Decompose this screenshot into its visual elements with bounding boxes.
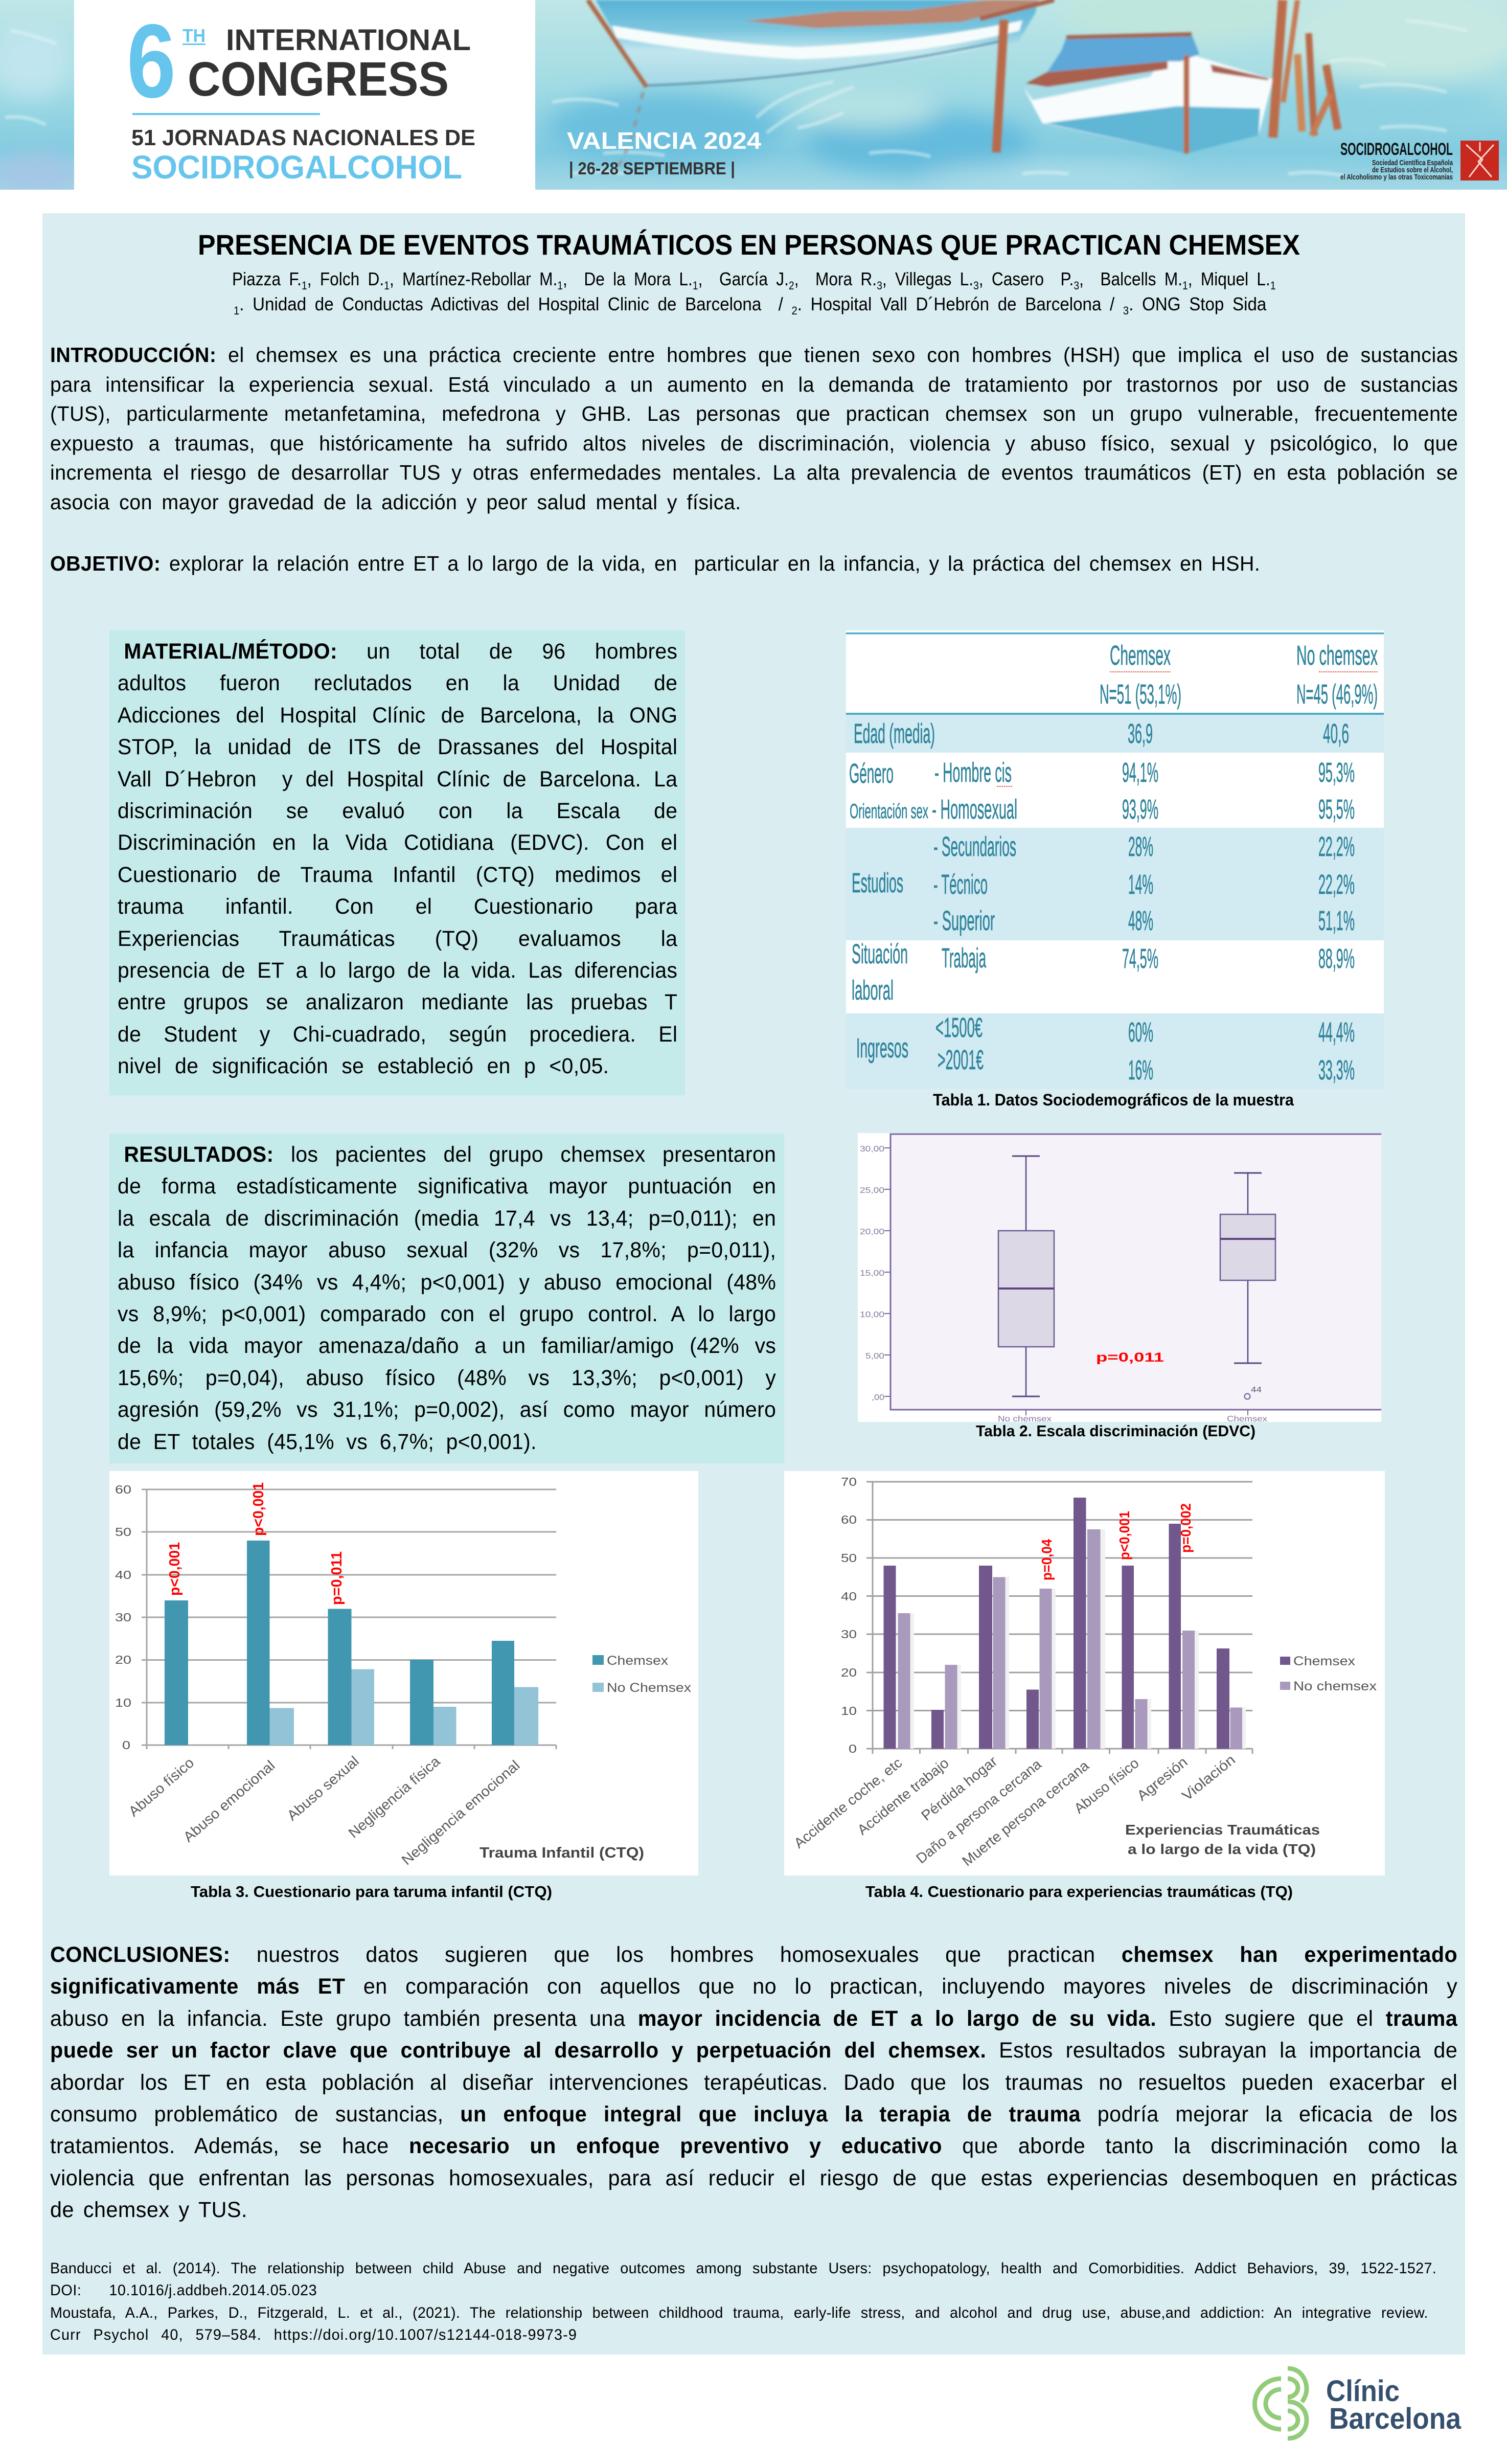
- results text: abuso físico (34% vs 4,4%; p<0,001) y abuso emocional (48%: [118, 1270, 776, 1295]
- p values: [1039, 1503, 1194, 1580]
- references: Curr Psychol 40, 579–584. https://doi.org/10.1007/s12144-018-9973-9: [50, 2326, 577, 2343]
- y axis: 20,00: [860, 1228, 884, 1236]
- p values: p<0,001: [167, 1542, 183, 1596]
- bars: no chemsex: [898, 1529, 1242, 1749]
- bar chart: childhood trauma CTQ: [109, 1471, 698, 1875]
- x axis labels: [998, 1410, 1267, 1423]
- x axis labels: Accidente coche, etc: [791, 1755, 905, 1851]
- material and method text: STOP, la unidad de ITS de Drassanes del Hospital: [118, 735, 677, 759]
- table header: N=51 (53,1%): [1100, 679, 1181, 710]
- y axis labels: 0: [849, 1742, 857, 1755]
- y axis: ,00: [872, 1393, 884, 1402]
- table values: no chemsex: [1318, 718, 1355, 1086]
- introduction text: incrementa el riesgo de desarrollar TUS y otras enfermedades mentales. La alta prevalencia de eventos traumáticos (ET) en esta población se: [50, 461, 1458, 484]
- box plot: discrimination scale: 44: [1251, 1386, 1262, 1394]
- x axis labels: [791, 1752, 1238, 1869]
- table values: chemsex: 48%: [1128, 906, 1153, 936]
- y axis labels: 10: [841, 1704, 857, 1717]
- painting: small boat: [996, 0, 1338, 153]
- x axis labels: Abuso físico: [126, 1754, 197, 1820]
- table 1: sociodemographic data: [846, 630, 1384, 1086]
- table row labels: laboral: [852, 975, 894, 1006]
- bars: chemsex: [883, 1498, 1229, 1749]
- y axis labels: 40: [841, 1590, 857, 1603]
- results text: agresión (59,2% vs 31,1%; p=0,002), así como mayor número: [118, 1397, 776, 1422]
- table row labels: Trabaja: [942, 943, 986, 974]
- table row labels: Situación: [852, 939, 908, 969]
- caption: table 2: Tabla 2. Escala discriminación (EDVC): [976, 1422, 1255, 1440]
- table row labels: Edad (media): [854, 718, 935, 749]
- y axis: 25,00: [860, 1186, 884, 1195]
- gridlines: [866, 1482, 1252, 1754]
- bar shadows: [910, 1529, 1246, 1749]
- conclusions text: abuso en la infancia. Este grupo también presenta una mayor incidencia de ET a lo largo de su vida. Esto sugiere que el trauma: [50, 2006, 1457, 2031]
- location and dates: [567, 127, 761, 178]
- spell-check squiggles: [997, 672, 1378, 786]
- socidrogalcohol society logo: de Estudios sobre el Alcohol,: [1372, 166, 1453, 174]
- congress logo panel: 51 JORNADAS NACIONALES DE: [131, 125, 475, 150]
- location and dates: VALENCIA 2024: [567, 127, 761, 154]
- p values: p<0,001: [1116, 1511, 1132, 1560]
- table row labels: - Homosexual: [932, 794, 1017, 825]
- table row labels: <1500€: [935, 1012, 983, 1043]
- table values: chemsex: [1122, 718, 1158, 1086]
- box plot: discrimination scale: [858, 1133, 1381, 1422]
- bars: chemsex: [165, 1541, 514, 1745]
- table values: no chemsex: 40,6: [1323, 718, 1349, 749]
- chart title: [1125, 1822, 1320, 1857]
- table values: chemsex: 36,9: [1128, 718, 1153, 749]
- material and method text: entre grupos se analizaron mediante las pruebas T: [118, 990, 677, 1014]
- y axis labels: 60: [115, 1483, 131, 1496]
- legend: Chemsex: [607, 1654, 669, 1668]
- table values: chemsex: 14%: [1128, 869, 1153, 900]
- y axis labels: 50: [841, 1551, 857, 1565]
- logo wordmark: Clínic: [1326, 2375, 1400, 2408]
- table row labels: >2001€: [938, 1045, 984, 1075]
- material and method text: Cuestionario de Trauma Infantil (CTQ) medimos el: [118, 863, 677, 887]
- x axis labels: Abuso emocional: [180, 1757, 278, 1845]
- y axis labels: 0: [122, 1738, 130, 1752]
- caption: table 4: Tabla 4. Cuestionario para experiencias traumáticas (TQ): [865, 1883, 1293, 1901]
- x axis labels: [126, 1753, 523, 1868]
- y axis labels: 60: [841, 1513, 857, 1526]
- y axis labels: 30: [841, 1627, 857, 1641]
- material and method text: Vall D´Hebron y del Hospital Clínic de Barcelona. La: [118, 767, 677, 792]
- material and method text: Adicciones del Hospital Clínic de Barcelona, la ONG: [118, 703, 677, 728]
- material and method text: discriminación se evaluó con la Escala de: [118, 799, 677, 823]
- y axis labels: 70: [841, 1475, 857, 1488]
- legend: Chemsex: [1293, 1654, 1356, 1668]
- material and method text: trauma infantil. Con el Cuestionario para: [118, 894, 677, 919]
- logo wordmark: [1326, 2375, 1462, 2435]
- material and method text: MATERIAL/MÉTODO: un total de 96 hombres: [124, 639, 677, 664]
- results text: de forma estadísticamente significativa mayor puntuación en: [118, 1174, 776, 1199]
- bar chart: traumatic experiences TQ: [784, 1471, 1385, 1875]
- conclusions text: CONCLUSIONES: nuestros datos sugieren que los hombres homosexuales que practican chemsex han experimentado: [50, 1942, 1457, 1967]
- y axis: 5,00: [865, 1352, 884, 1361]
- material and method box: [109, 630, 685, 1095]
- introduction text: asocia con mayor gravedad de la adicción y peor salud mental y física.: [50, 490, 741, 514]
- results text: 15,6%; p=0,04), abuso físico (48% vs 13,3%; p<0,001) y: [118, 1366, 776, 1390]
- y axis labels: 50: [115, 1525, 131, 1539]
- table 1: sociodemographic data: 74,5%: [1122, 943, 1158, 974]
- affiliations: 1. Unidad de Conductas Adictivas del Hospital Clinic de Barcelona / 2. Hospital Vall D´Hebrón de Barcelona / 3. ONG Stop Sida: [234, 293, 1266, 317]
- y axis: [860, 1145, 890, 1402]
- conclusions text: consumo problemático de sustancias, un enfoque integral que incluya la terapia de trauma podría mejorar la eficacia de los: [50, 2102, 1457, 2127]
- x axis labels: Daño a persona cercana: [913, 1756, 1044, 1867]
- y axis labels: 20: [841, 1666, 857, 1679]
- introduction text: (TUS), particularmente metanfetamina, mefedrona y GHB. Las personas que practican chemsex son un grupo vulnerable, frecuentemente: [50, 402, 1458, 425]
- conclusions text: abordar los ET en esta población al diseñar intervenciones terapéuticas. Dado que los traumas no resueltos pueden exacerbar el: [50, 2070, 1457, 2095]
- results text: la escala de discriminación (media 17,4 vs 13,4; p=0,011); en: [118, 1206, 776, 1231]
- table 1: sociodemographic data: 94,1%: [1122, 757, 1158, 788]
- x axis labels: Abuso físico: [1071, 1755, 1142, 1817]
- table header: [1100, 640, 1378, 710]
- table row labels: Orientación sex: [850, 800, 928, 823]
- y axis labels: 10: [115, 1696, 131, 1709]
- caption: table 3: Tabla 3. Cuestionario para taruma infantil (CTQ): [191, 1883, 552, 1901]
- legend: No chemsex: [1293, 1679, 1377, 1693]
- congress logo panel: SOCIDROGALCOHOL: [131, 149, 462, 186]
- material and method text: adultos fueron reclutados en la Unidad de: [118, 671, 677, 695]
- introduction text: [50, 343, 1458, 514]
- material and method text: de Student y Chi-cuadrado, según procediera. El: [118, 1022, 677, 1047]
- x axis labels: Accidente trabajo: [854, 1755, 952, 1838]
- y axis: 10,00: [860, 1310, 884, 1319]
- bars: no chemsex: [270, 1669, 538, 1745]
- table row labels: Ingresos: [856, 1033, 908, 1064]
- table row labels: [849, 718, 1017, 1075]
- conclusions text: [50, 1942, 1458, 2222]
- references: Moustafa, A.A., Parkes, D., Fitzgerald, L. et al., (2021). The relationship between childhood trauma, early-life stress, and alcohol and drug use, abuse,and addiction: An integrative review.: [50, 2304, 1428, 2321]
- results text: [118, 1142, 776, 1454]
- introduction text: para intensificar la experiencia sexual. Está vinculado a un aumento en la demanda de tratamiento por trastornos por uso de sustancias: [50, 373, 1458, 396]
- p values: p=0,002: [1178, 1503, 1194, 1553]
- y axis labels: [841, 1475, 857, 1755]
- legend: [1280, 1654, 1377, 1693]
- results text: de la vida mayor amenaza/daño a un familiar/amigo (42% vs: [118, 1333, 776, 1358]
- location and dates: | 26-28 SEPTIEMBRE |: [569, 159, 735, 178]
- congress logo panel: INTERNATIONAL: [226, 24, 471, 57]
- table row labels: - Hombre cis: [934, 757, 1012, 788]
- material and method text: nivel de significación se estableció en p <0,05.: [118, 1054, 609, 1078]
- legend: [592, 1654, 692, 1695]
- box: no chemsex: [998, 1156, 1054, 1396]
- painting: large boat: [588, 0, 1054, 174]
- p values: p=0,04: [1039, 1539, 1055, 1580]
- gridlines: [142, 1489, 556, 1749]
- congress logo panel: TH: [182, 25, 206, 46]
- introduction text: expuesto a traumas, que históricamente ha sufrido altos niveles de discriminación, violencia y abuso físico, sexual y psicológico, lo que: [50, 432, 1458, 455]
- painting: sea background: [0, 0, 1507, 194]
- p values: p<0,001: [250, 1482, 267, 1536]
- results text: la infancia mayor abuso sexual (32% vs 17,8%; p=0,011),: [118, 1238, 776, 1262]
- congress logo panel: 6: [127, 3, 176, 120]
- table values: chemsex: 16%: [1128, 1055, 1153, 1086]
- chart title: Experiencias Traumáticas: [1125, 1822, 1320, 1838]
- objective text: OBJETIVO: explorar la relación entre ET a lo largo de la vida, en particular en la infancia, y la práctica del chemsex en HSH.: [50, 552, 1260, 575]
- clinic barcelona logo: [1247, 2362, 1467, 2444]
- conclusions text: significativamente más ET en comparación con aquellos que no lo practican, incluyendo mayores niveles de discriminación y: [50, 1974, 1457, 1999]
- table 1: sociodemographic data: 93,9%: [1122, 794, 1158, 825]
- x axis labels: Muerte persona cercana: [959, 1757, 1092, 1869]
- introduction text: INTRODUCCIÓN: el chemsex es una práctica creciente entre hombres que tienen sexo con hombres (HSH) que implica el uso de sustancias: [50, 343, 1458, 367]
- socidrogalcohol society logo: [1340, 140, 1499, 182]
- table values: chemsex: 28%: [1128, 831, 1153, 862]
- p values: p=0,011: [329, 1551, 345, 1605]
- results text: RESULTADOS: los pacientes del grupo chemsex presentaron: [124, 1142, 776, 1167]
- x axis labels: Negligencia emocional: [399, 1757, 523, 1868]
- x axis labels: Violación: [1179, 1752, 1238, 1804]
- chart title: Trauma Infantil (CTQ): [480, 1845, 644, 1861]
- table values: chemsex: 60%: [1128, 1017, 1153, 1048]
- socidrogalcohol society logo: el Alcoholismo y las otras Toxicomanías: [1340, 173, 1453, 182]
- congress logo panel: CONGRESS: [188, 52, 449, 106]
- p values: [167, 1482, 345, 1605]
- material and method text: Experiencias Traumáticas (TQ) evaluamos la: [118, 926, 677, 951]
- congress logo panel: [74, 0, 535, 190]
- legend: No Chemsex: [607, 1681, 692, 1695]
- conclusions text: violencia que enfrentan las personas homosexuales, para así reducir el riesgo de que estas experiencias desemboquen en prácticas: [50, 2166, 1457, 2190]
- results text: de ET totales (45,1% vs 6,7%; p<0,001).: [118, 1430, 537, 1454]
- y axis labels: 40: [115, 1568, 131, 1581]
- table row labels: Género: [849, 758, 894, 789]
- y axis labels: 20: [115, 1653, 131, 1666]
- logo mark: green arcs: [1254, 2368, 1307, 2438]
- x axis labels: Agresión: [1134, 1754, 1191, 1804]
- results box: [109, 1134, 784, 1463]
- p value: p=0,011: [1096, 1350, 1164, 1365]
- conclusions text: puede ser un factor clave que contribuye al desarrollo y perpetuación del chemsex. Estos resultados subrayan la importancia de: [50, 2038, 1457, 2063]
- x axis labels: Abuso sexual: [284, 1753, 362, 1824]
- conclusions text: de chemsex y TUS.: [50, 2198, 247, 2222]
- table row labels: Estudios: [852, 868, 903, 898]
- y axis labels: [115, 1483, 131, 1752]
- table 1: sociodemographic data: - Secundarios: [933, 831, 1016, 862]
- y axis labels: 30: [115, 1611, 131, 1624]
- x axis labels: Negligencia física: [346, 1753, 443, 1841]
- material and method text: [118, 639, 677, 1078]
- material and method text: Discriminación en la Vida Cotidiana (EDVC). Con el: [118, 830, 677, 855]
- material and method text: presencia de ET a lo largo de la vida. Las diferencias: [118, 958, 677, 983]
- table row labels: - Superior: [933, 906, 995, 936]
- authors: Piazza F.1, Folch D.1, Martínez-Rebollar M.1, De la Mora L.1, García J.2, Mora R.3, Villegas L.3, Casero P.3, Balcells M.1, Miquel L.1: [232, 268, 1276, 292]
- y axis: 15,00: [860, 1269, 884, 1278]
- references: [50, 2257, 1436, 2346]
- chart title: a lo largo de la vida (TQ): [1128, 1841, 1316, 1857]
- references: Banducci et al. (2014). The relationship between child Abuse and negative outcomes among substante Users: psychopatology, health and Comorbidities. Addict Behaviors, 39, 1522-1527.: [50, 2260, 1436, 2277]
- y axis: 30,00: [860, 1145, 884, 1154]
- socidrogalcohol society logo: Sociedad Científica Española: [1372, 159, 1453, 167]
- table header: Chemsex: [1110, 640, 1171, 671]
- header banner: [0, 0, 1507, 190]
- x axis labels: Pérdida hogar: [918, 1753, 1000, 1824]
- references: DOI: 10.1016/j.addbeh.2014.05.023: [50, 2282, 317, 2299]
- table row labels: - Técnico: [933, 869, 988, 900]
- conclusions text: tratamientos. Además, se hace necesario un enfoque preventivo y educativo que aborde tanto la discriminación como la: [50, 2134, 1457, 2158]
- box: chemsex: [1220, 1173, 1275, 1399]
- results text: vs 8,9%; p<0,001) comparado con el grupo control. A lo largo: [118, 1302, 776, 1326]
- table row bands: [846, 715, 1384, 1089]
